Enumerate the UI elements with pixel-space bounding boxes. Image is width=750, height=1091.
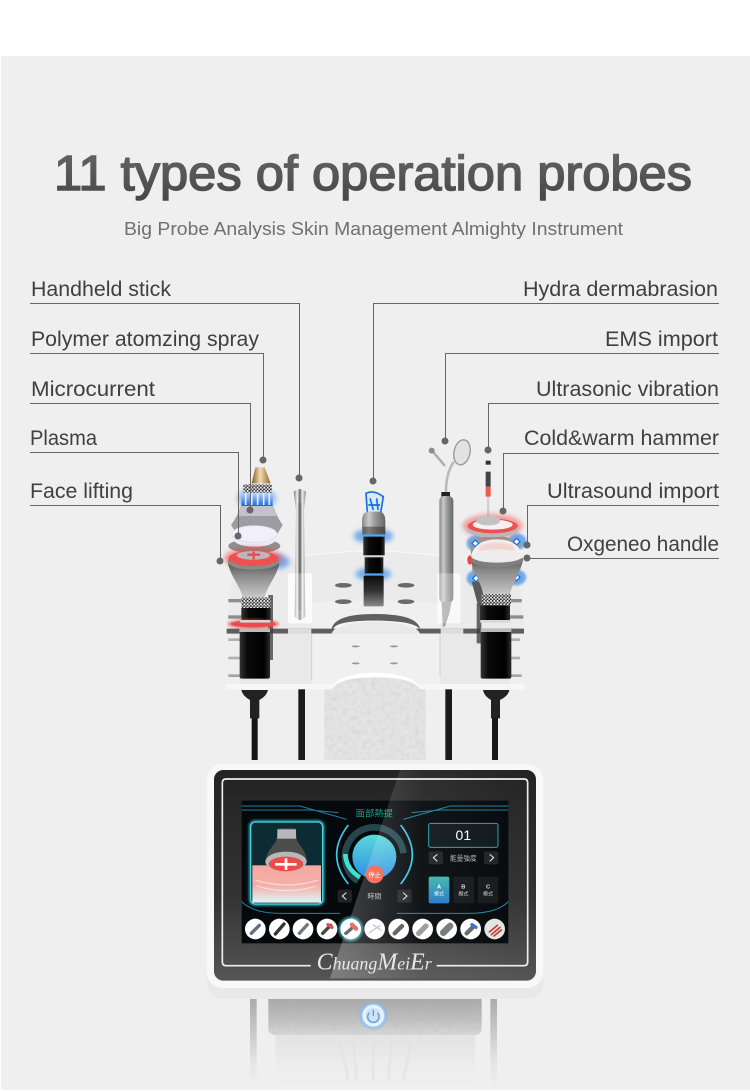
dial: 停止 xyxy=(368,870,381,879)
mode buttons: 模式 xyxy=(434,891,444,898)
probe selector icons xyxy=(245,917,505,941)
dial xyxy=(333,816,415,898)
probe: handheld stick xyxy=(288,489,312,623)
value display xyxy=(429,823,498,847)
label: oxgeneo handle: Oxgeneo handle xyxy=(567,533,719,556)
mode buttons xyxy=(429,877,498,903)
central column xyxy=(324,673,426,760)
leader: microcurrent xyxy=(30,404,254,514)
leader: polymer atomizing spray xyxy=(30,354,266,464)
leader: hydra dermabrasion xyxy=(370,304,719,484)
notch highlight xyxy=(333,621,419,629)
holder right xyxy=(437,573,461,623)
table slats xyxy=(228,599,523,677)
table middle lighter area xyxy=(312,600,440,629)
treatment image xyxy=(250,821,323,905)
cables xyxy=(241,689,509,760)
probe: ultrasonic vibration xyxy=(463,461,523,538)
label: hydra dermabrasion: Hydra dermabrasion xyxy=(523,278,718,301)
energy control xyxy=(429,851,498,864)
brand logo: ChuangMeiEr xyxy=(317,949,433,975)
screen title: 面部熱提 xyxy=(356,808,394,819)
device xyxy=(207,438,543,1090)
mode buttons: C xyxy=(486,884,490,890)
label: handheld stick: Handheld stick xyxy=(31,278,171,301)
leader: handheld stick xyxy=(30,304,302,482)
leader: face lifting xyxy=(30,506,224,564)
title: 11 types of operation probes xyxy=(54,147,692,201)
leader: cold and warm hammer xyxy=(500,454,719,514)
mode buttons: 模式 xyxy=(458,891,468,898)
time control: 時間 xyxy=(367,893,381,901)
mode buttons: A xyxy=(437,884,441,890)
table dark front edge xyxy=(227,614,524,634)
energy control: 能量強度 xyxy=(450,853,477,862)
table lower plate xyxy=(227,622,524,689)
touch screen xyxy=(242,801,508,943)
probe: hydra dermabrasion xyxy=(353,492,393,606)
lower body xyxy=(250,998,497,1090)
leader: oxgeneo handle xyxy=(524,554,719,562)
probe: microcurrent xyxy=(231,506,283,534)
label: cold and warm hammer: Cold&warm hammer xyxy=(524,427,719,450)
leader: plasma xyxy=(30,452,242,540)
probe: ultrasound import xyxy=(467,534,527,607)
leader: ultrasonic vibration xyxy=(484,404,719,454)
value display: 01 xyxy=(456,827,471,843)
probe: polymer atomizing spray xyxy=(237,467,277,510)
holes xyxy=(335,583,414,604)
label: ultrasound import: Ultrasound import xyxy=(547,480,719,503)
probe: face lifting xyxy=(224,547,290,679)
table back plate xyxy=(227,552,524,630)
control panel housing xyxy=(207,764,543,999)
label: microcurrent: Microcurrent xyxy=(31,378,155,401)
glass sheen xyxy=(330,770,533,978)
power button xyxy=(359,1002,387,1030)
probe: EMS import xyxy=(429,438,472,627)
table back plate arch xyxy=(293,551,457,558)
leader: EMS import xyxy=(442,354,719,444)
probe: oxgeneo handle xyxy=(467,539,523,679)
mode buttons: B xyxy=(461,884,465,890)
panel white outline xyxy=(222,779,528,966)
label: face lifting: Face lifting xyxy=(30,480,133,503)
subtitle: Big Probe Analysis Skin Management Almighty Instrument xyxy=(124,218,623,239)
time control xyxy=(338,890,412,903)
probe: plasma xyxy=(228,526,280,553)
label: ultrasonic vibration: Ultrasonic vibration xyxy=(536,378,719,401)
holder left xyxy=(288,573,312,623)
label: EMS import: EMS import xyxy=(605,328,718,351)
shadow probes behind handles xyxy=(268,595,481,660)
label: plasma: Plasma xyxy=(30,427,97,450)
leader: ultrasound import xyxy=(524,506,719,548)
mode buttons: 模式 xyxy=(483,891,493,898)
decorative top left line xyxy=(242,806,347,819)
label: polymer atomizing spray: Polymer atomzing spray xyxy=(31,328,260,351)
